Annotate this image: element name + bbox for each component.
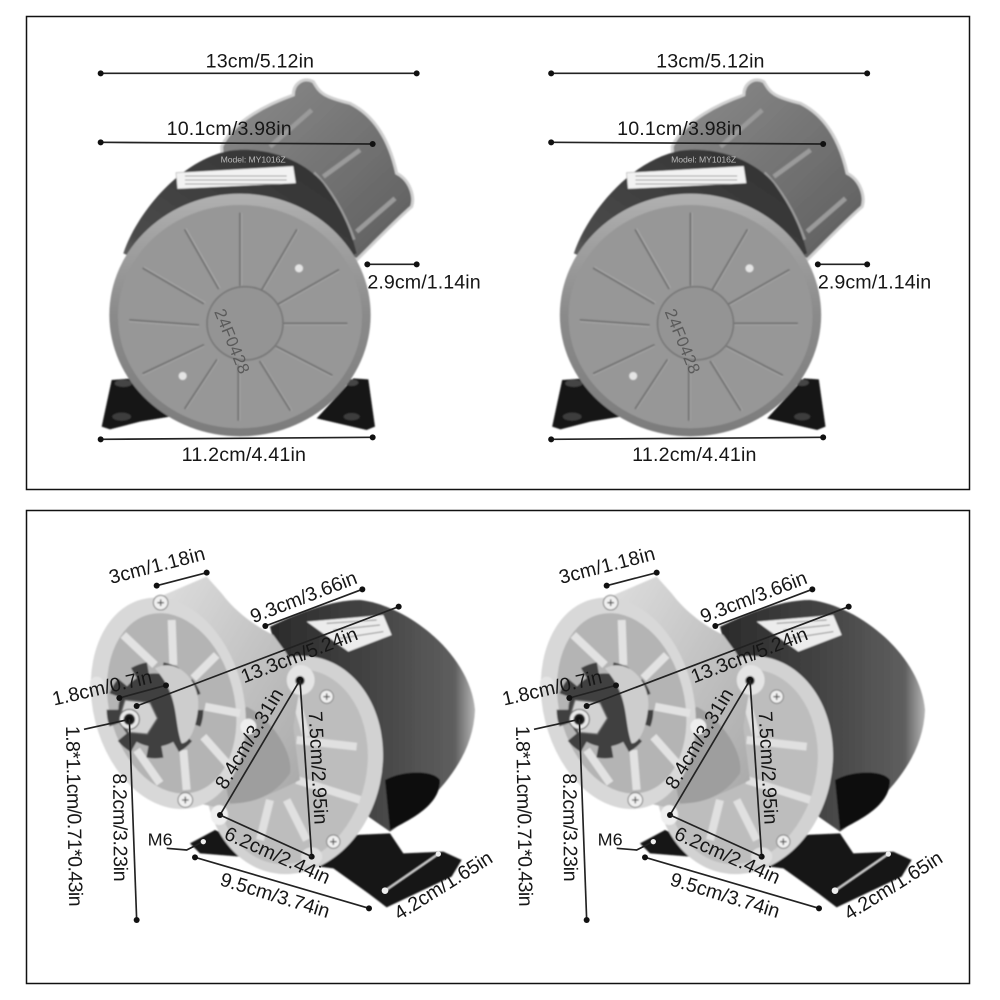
vertical mount holes — [300, 680, 332, 860]
vertical mount holes: 7.5cm/2.95in — [754, 711, 782, 825]
hub stamp: 24F0428 — [210, 306, 254, 377]
gear offset dimension — [364, 261, 481, 293]
shaft size: 1.8*1.1cm/0.71*0.43in — [511, 726, 536, 907]
diagonal mount holes — [211, 677, 303, 818]
base width: 4.2cm/1.65in — [390, 847, 497, 925]
gear offset dimension: 2.9cm/1.14in — [367, 271, 481, 293]
M6 callout: M6 — [598, 830, 623, 850]
lower mount holes: 6.2cm/2.44in — [221, 823, 333, 889]
motor length: 9.3cm/3.66in — [247, 567, 360, 628]
sprocket width: 1.8cm/0.7in — [50, 666, 154, 711]
shaft height: 8.2cm/3.23in — [558, 773, 581, 882]
panel: top frame — [26, 16, 970, 490]
motor width dimension — [98, 118, 376, 147]
base width dimension — [548, 434, 826, 466]
shaft size — [511, 716, 582, 907]
motor photo, sprocket view — [519, 577, 925, 907]
M6 callout: M6 — [148, 830, 173, 850]
width dimension: 13cm/5.12in — [656, 51, 764, 73]
gear housing width: 3cm/1.18in — [557, 543, 657, 589]
motor length: 9.3cm/3.66in — [697, 567, 810, 628]
diagonal mount holes: 8.4cm/3.31in — [211, 685, 288, 793]
base width dimension: 11.2cm/4.41in — [632, 444, 756, 466]
lower mount holes: 6.2cm/2.44in — [671, 823, 783, 889]
diagonal mount holes: 8.4cm/3.31in — [661, 685, 738, 793]
base length — [642, 854, 822, 923]
motor label model: Model: MY1016Z — [671, 155, 737, 165]
motor width dimension: 10.1cm/3.98in — [617, 118, 742, 140]
bottom right dimensioned motor — [500, 543, 947, 925]
gear offset dimension: 2.9cm/1.14in — [818, 271, 931, 293]
motor width dimension: 10.1cm/3.98in — [167, 118, 292, 140]
base width dimension: 11.2cm/4.41in — [182, 444, 306, 466]
overall length: 13.3cm/5.24in — [238, 623, 361, 688]
shaft size: 1.8*1.1cm/0.71*0.43in — [61, 726, 86, 907]
panel: bottom frame — [26, 510, 970, 984]
sprocket width: 1.8cm/0.7in — [500, 666, 604, 711]
base width dimension — [98, 434, 376, 466]
bottom left dimensioned motor — [50, 543, 497, 925]
M6 callout — [598, 830, 656, 850]
motor photo, rear view — [102, 80, 413, 436]
overall length: 13.3cm/5.24in — [688, 623, 811, 688]
top right dimensioned motor — [548, 51, 931, 466]
shaft height: 8.2cm/3.23in — [108, 773, 131, 882]
width dimension — [548, 51, 870, 76]
overall length — [134, 604, 402, 709]
base length — [192, 854, 372, 923]
shaft size — [61, 716, 132, 907]
diagonal mount holes — [661, 677, 753, 818]
motor width dimension — [548, 118, 826, 147]
gear offset dimension — [815, 261, 931, 293]
gear housing width: 3cm/1.18in — [107, 543, 207, 589]
motor photo, sprocket view — [69, 577, 475, 907]
motor photo, rear view — [552, 80, 863, 436]
vertical mount holes — [750, 680, 782, 860]
base length: 9.5cm/3.74in — [668, 869, 782, 923]
shaft height — [558, 719, 590, 923]
width dimension — [98, 51, 420, 76]
shaft height — [108, 719, 140, 923]
base width: 4.2cm/1.65in — [840, 847, 947, 925]
overall length — [584, 604, 852, 709]
hub stamp: 24F0428 — [661, 306, 704, 377]
base length: 9.5cm/3.74in — [218, 869, 332, 923]
vertical mount holes: 7.5cm/2.95in — [304, 711, 332, 825]
M6 callout — [148, 830, 206, 850]
width dimension: 13cm/5.12in — [206, 51, 314, 73]
top left dimensioned motor — [98, 51, 481, 466]
motor label model: Model: MY1016Z — [221, 155, 286, 165]
